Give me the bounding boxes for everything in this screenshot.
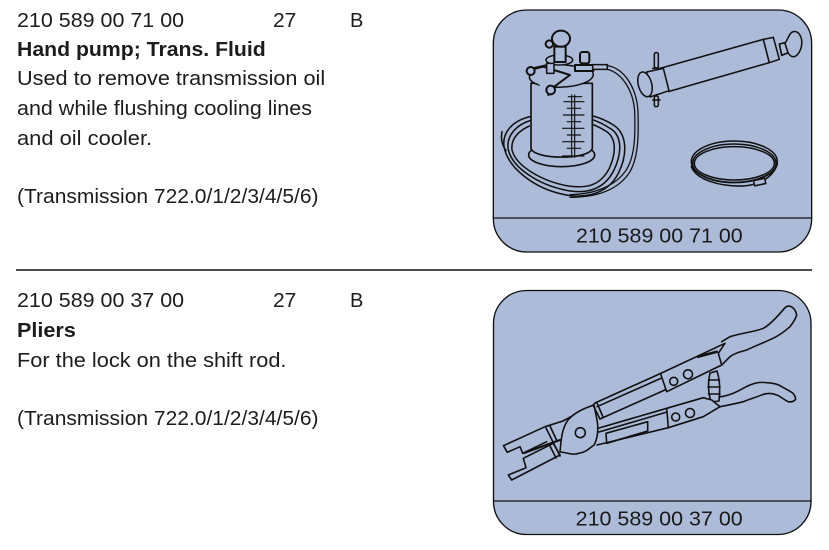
label: part number in panel 2: 210 589 00 37 00 (576, 508, 743, 530)
panel: hand pump illustration (493, 10, 812, 252)
part number row 2: 210 589 00 37 00 (17, 290, 184, 312)
icon: coiled hose around reservoir (501, 116, 625, 196)
icon: pliers (504, 306, 797, 480)
part number row 2 (17, 290, 363, 312)
part number row 2: 27 (273, 290, 296, 312)
heading: hand pump: Hand pump; Trans. Fluid (17, 39, 266, 61)
part number row 1 (17, 10, 363, 32)
description: hand pump: and while flushing cooling lines (17, 98, 312, 120)
part number row 1: 210 589 00 71 00 (17, 10, 184, 32)
transmission note 1: (Transmission 722.0/1/2/3/4/5/6) (17, 186, 319, 208)
part number row 1: B (350, 10, 363, 32)
description: pliers: For the lock on the shift rod. (17, 350, 286, 372)
description: hand pump (17, 68, 325, 150)
description: hand pump: and oil cooler. (17, 128, 152, 150)
part number row 2: B (350, 290, 363, 312)
label: part number in panel 1: 210 589 00 71 00 (576, 226, 743, 248)
panel: pliers illustration (494, 290, 811, 534)
icon: hand pump barrel (635, 32, 802, 107)
heading: pliers: Pliers (17, 320, 76, 342)
icon: small tubing coil (691, 141, 777, 186)
description: hand pump: Used to remove transmission oil (17, 68, 325, 90)
transmission note 2: (Transmission 722.0/1/2/3/4/5/6) (17, 408, 319, 430)
part number row 1: 27 (273, 10, 296, 32)
icon: reservoir cylinder (527, 31, 607, 167)
icon: hose to pump (570, 65, 638, 197)
